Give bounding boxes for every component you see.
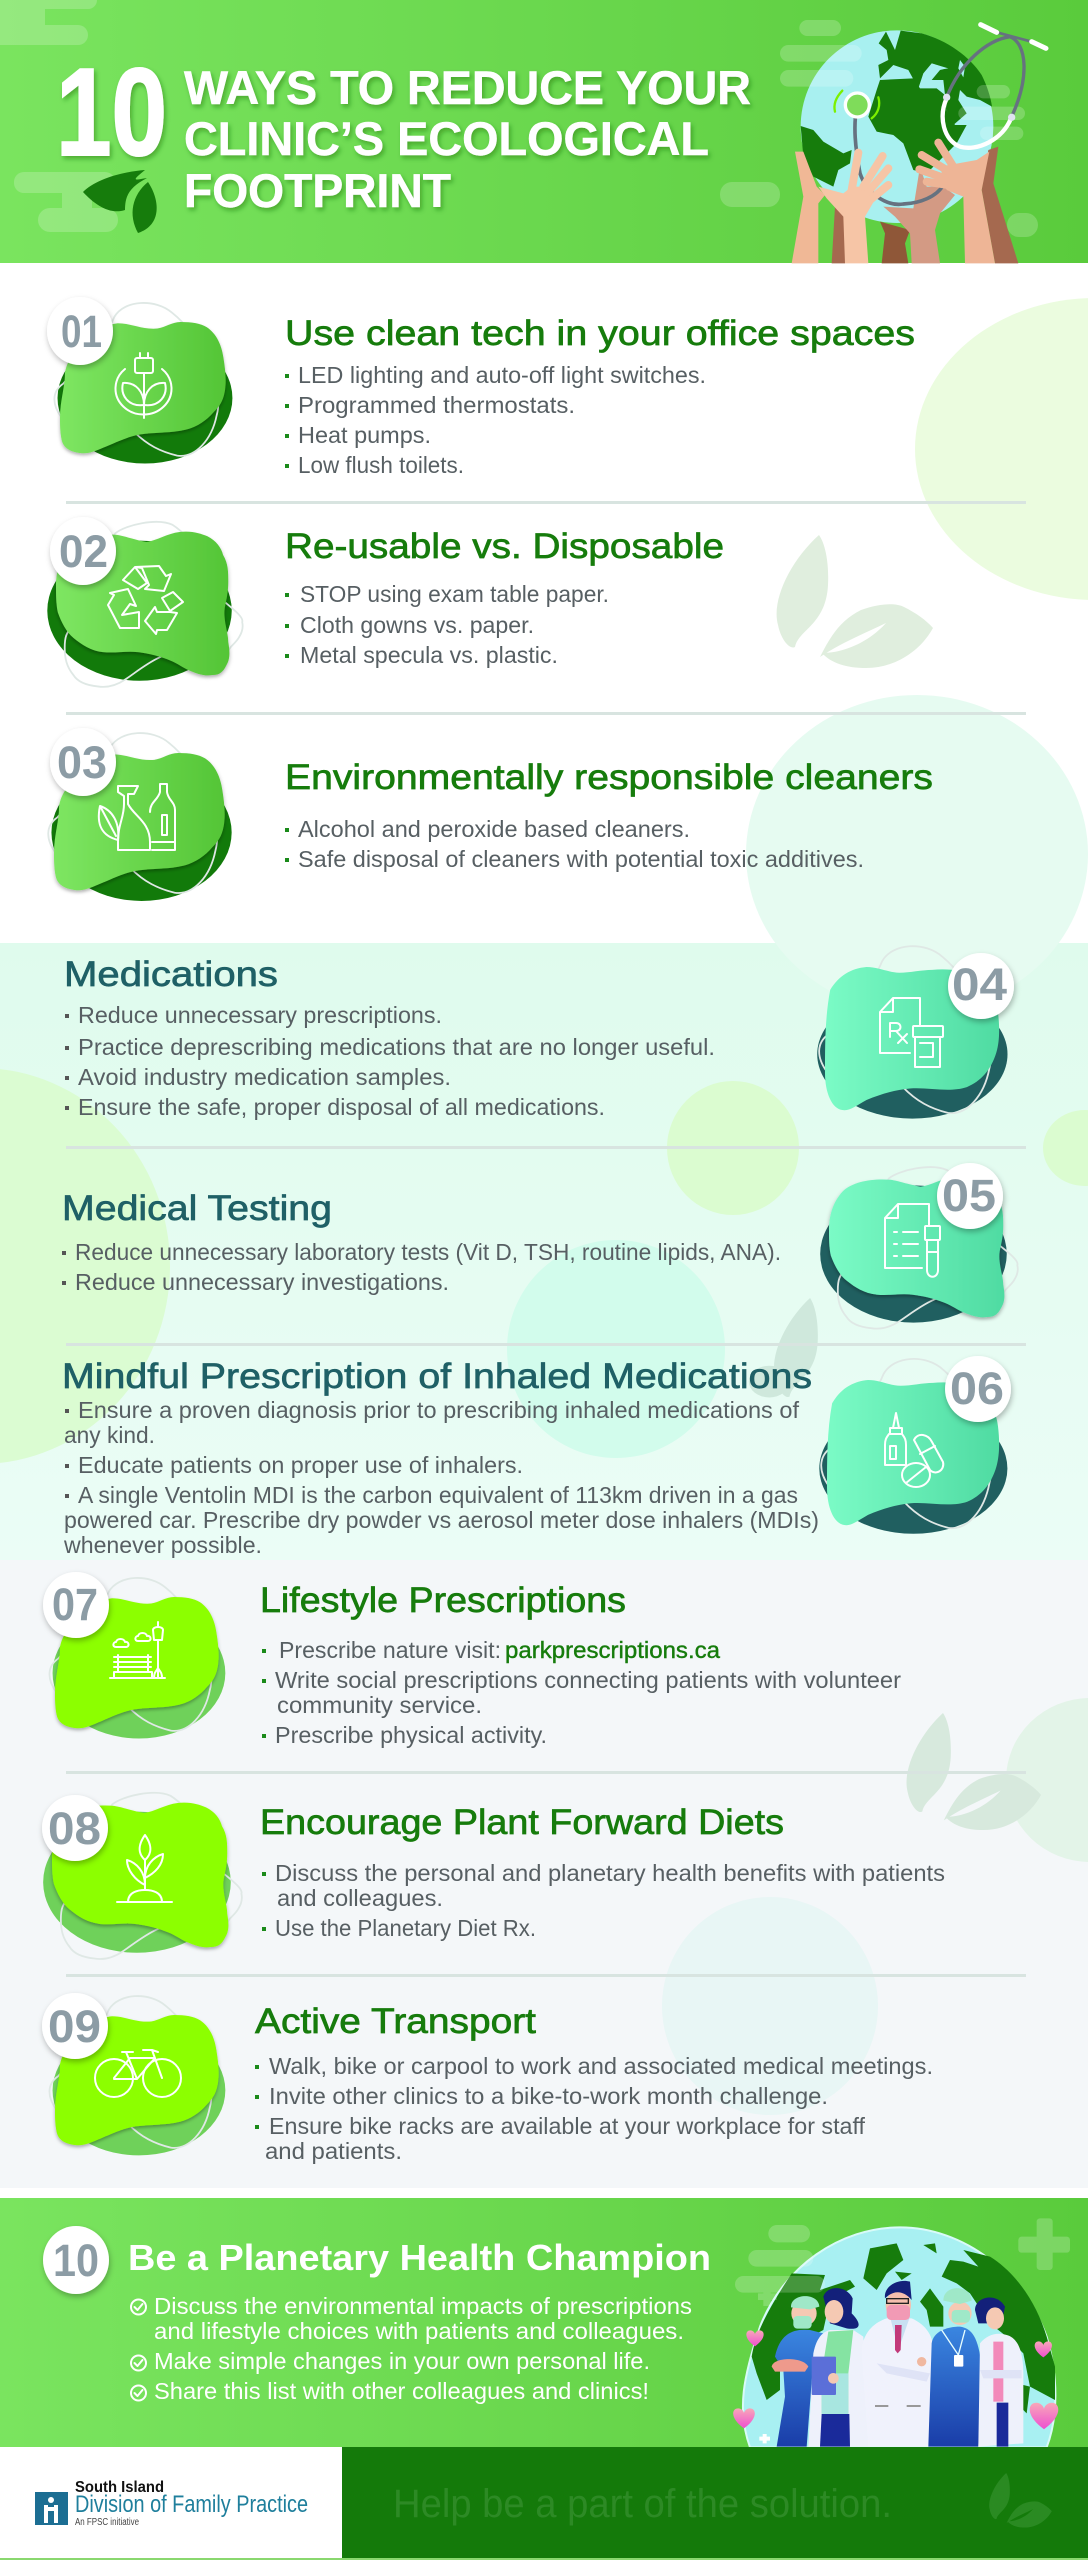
list 03: Alcohol and peroxide based cleaners. — [298, 816, 690, 842]
icon: 04 blob with prescription — [817, 946, 1008, 1119]
panel: 08 plant forward diets — [42, 1793, 945, 1959]
stethoscope — [834, 25, 1046, 204]
heading 09: Active Transport — [255, 2001, 536, 2041]
list 05: Reduce unnecessary laboratory tests (Vit D, TSH, routine lipids, ANA). — [75, 1239, 781, 1265]
surgeon right — [928, 2288, 982, 2447]
header left background bars — [0, 0, 1038, 237]
number badge 07: 07 — [52, 1579, 98, 1630]
lead doctor — [862, 2281, 933, 2447]
illustration: globe with medical team — [733, 2218, 1070, 2447]
title number: 10 — [56, 44, 167, 182]
list 02: STOP using exam table paper. — [300, 581, 609, 607]
number badge 01: 01 — [61, 306, 102, 357]
icon: 03 blob with bottles — [48, 733, 232, 901]
right hand — [940, 152, 995, 263]
list 04: Avoid industry medication samples. — [78, 1064, 451, 1090]
list 02: Cloth gowns vs. paper. — [300, 612, 534, 638]
number badge 10: 10 — [53, 2235, 99, 2286]
panel: footer logo — [0, 2447, 342, 2560]
organisation name: Division of Family Practice — [75, 2491, 308, 2518]
checklist: Make simple changes in your own personal life. — [154, 2348, 650, 2374]
panel: 10 planetary health champion — [0, 2198, 1088, 2447]
list 08: and colleagues. — [277, 1885, 443, 1911]
heading 02: Re-usable vs. Disposable — [285, 526, 724, 566]
title: FOOTPRINT — [184, 164, 451, 217]
section dividers — [66, 501, 1026, 1977]
list 04: Ensure the safe, proper disposal of all medications. — [78, 1094, 605, 1120]
list 09: Walk, bike or carpool to work and associated medical meetings. — [269, 2053, 933, 2079]
icon: dark green leaves — [83, 170, 157, 233]
panel: 02 reusable — [47, 517, 724, 687]
list 01 — [285, 362, 706, 478]
number badge 10 — [43, 2226, 109, 2294]
organisation name — [75, 2479, 308, 2528]
list 07: parkprescriptions.ca — [505, 1637, 720, 1663]
list 03: Safe disposal of cleaners with potential toxic additives. — [298, 846, 864, 872]
icon: 09 blob with bicycle — [49, 1996, 225, 2155]
list 06: Ensure a proven diagnosis prior to prescribing inhaled medications of — [78, 1397, 800, 1423]
list 04 — [65, 1002, 715, 1120]
number badge 05 — [937, 1163, 1003, 1229]
list 07: Write social prescriptions connecting patients with volunteer — [275, 1667, 901, 1693]
number badge 02: 02 — [59, 526, 108, 577]
number badge 07 — [43, 1572, 109, 1638]
list 02 — [285, 581, 609, 668]
surgeon left — [772, 2296, 823, 2447]
panel: footer tagline — [0, 2447, 1088, 2560]
panel: 05 medical testing — [62, 1163, 1018, 1329]
checklist: Share this list with other colleagues and clinics! — [154, 2378, 649, 2404]
heading 10: Be a Planetary Health Champion — [128, 2237, 711, 2278]
list 05 — [62, 1239, 781, 1295]
list 06: Educate patients on proper use of inhalers. — [78, 1452, 523, 1478]
list 08: Discuss the personal and planetary health benefits with patients — [275, 1860, 945, 1886]
list 06: powered car. Prescribe dry powder vs aerosol meter dose inhalers (MDIs) — [64, 1507, 819, 1533]
translucent bars and crosses — [735, 2218, 1070, 2306]
translucent bars over globe — [780, 20, 1025, 140]
title: WAYS TO REDUCE YOUR — [184, 61, 751, 114]
list 07: community service. — [277, 1692, 482, 1718]
list 03 — [285, 816, 864, 872]
number badge 04: 04 — [952, 959, 1007, 1010]
list 01: Low flush toilets. — [298, 452, 464, 478]
list 06: whenever possible. — [63, 1532, 262, 1558]
decorative leaves: section 3 — [907, 1713, 1041, 1830]
tagline: Help be a part of the solution. — [393, 2482, 892, 2526]
background circles — [0, 298, 1088, 2115]
checklist: Discuss the environmental impacts of prescriptions — [154, 2293, 692, 2319]
list 04: Reduce unnecessary prescriptions. — [78, 1002, 442, 1028]
list 07: Prescribe physical activity. — [275, 1722, 547, 1748]
panel: 07 lifestyle prescriptions — [43, 1572, 901, 1748]
list 01: Programmed thermostats. — [298, 392, 575, 418]
icon: footer leaves — [989, 2473, 1052, 2528]
list 09: and patients. — [265, 2138, 402, 2164]
list 06: any kind. — [64, 1422, 155, 1448]
decorative leaf: section 2 — [749, 1298, 818, 1397]
checklist — [131, 2293, 692, 2404]
list 09 — [255, 2053, 933, 2164]
icon: 08 blob with sprout — [43, 1793, 242, 1959]
icon: 07 blob with park bench — [49, 1578, 225, 1738]
title — [184, 61, 751, 217]
woman in white coat right — [975, 2297, 1023, 2447]
number badge 08 — [42, 1795, 108, 1861]
heading 01: Use clean tech in your office spaces — [285, 313, 915, 353]
icon: 02 blob with recycle — [47, 522, 243, 687]
list 05: Reduce unnecessary investigations. — [75, 1269, 449, 1295]
number badge 03 — [50, 728, 116, 796]
organisation name: South Island — [75, 2479, 164, 2496]
heading 03: Environmentally responsible cleaners — [285, 757, 933, 797]
panel: 06 inhaled medications — [62, 1356, 1011, 1558]
icon: 05 blob with lab report — [820, 1167, 1018, 1329]
arms behind — [832, 207, 847, 263]
number badge 09: 09 — [48, 2001, 101, 2052]
decorative leaves: section 1 — [777, 535, 933, 668]
list 01: LED lighting and auto-off light switches. — [298, 362, 706, 388]
heading 06: Mindful Prescription of Inhaled Medications — [62, 1356, 812, 1396]
list 09: Ensure bike racks are available at your workplace for staff — [269, 2113, 866, 2139]
list 04: Practice deprescribing medications that are no longer useful. — [78, 1034, 715, 1060]
number badge 06: 06 — [950, 1363, 1004, 1414]
left hands — [792, 152, 825, 263]
list 02: Metal specula vs. plastic. — [300, 642, 558, 668]
list 07: Prescribe nature visit: — [279, 1637, 501, 1663]
list 08 — [262, 1860, 945, 1941]
number badge 06 — [945, 1356, 1011, 1422]
logo mark — [35, 2492, 68, 2525]
number badge 08: 08 — [48, 1803, 101, 1854]
list 06 — [63, 1397, 819, 1558]
icon: globe with hands and stethoscope — [780, 20, 1046, 263]
list 01: Heat pumps. — [298, 422, 431, 448]
number badge 02 — [50, 517, 116, 585]
heading 07: Lifestyle Prescriptions — [260, 1580, 626, 1620]
icon: 06 blob with pills — [819, 1359, 1007, 1534]
number badge 09 — [42, 1993, 108, 2059]
list 07 — [262, 1637, 901, 1748]
number badge 04 — [948, 953, 1014, 1019]
panel: 09 active transport — [42, 1993, 933, 2164]
title: CLINIC’S ECOLOGICAL — [184, 112, 709, 165]
list 09: Invite other clinics to a bike-to-work month challenge. — [269, 2083, 828, 2109]
hearts — [733, 2330, 1058, 2429]
list 08: Use the Planetary Diet Rx. — [275, 1915, 536, 1941]
number badge 03: 03 — [57, 737, 107, 788]
heading 05: Medical Testing — [62, 1188, 332, 1228]
panel: 01 clean tech — [47, 297, 915, 478]
organisation name: An FPSC initiative — [75, 2517, 139, 2528]
small white cross — [759, 2434, 770, 2443]
panel: 03 cleaners — [48, 728, 933, 901]
panel: 04 medications — [64, 946, 1014, 1120]
woman in white coat left — [808, 2288, 870, 2447]
panel: header banner — [0, 0, 1088, 263]
heading 08: Encourage Plant Forward Diets — [260, 1802, 784, 1842]
number badge 01 — [47, 297, 113, 365]
list 06: A single Ventolin MDI is the carbon equivalent of 113km driven in a gas — [78, 1482, 798, 1508]
number badge 05: 05 — [942, 1170, 996, 1221]
icon: 01 blob with plug — [54, 303, 232, 463]
checklist: and lifestyle choices with patients and colleagues. — [154, 2318, 684, 2344]
heading 04: Medications — [64, 954, 278, 994]
